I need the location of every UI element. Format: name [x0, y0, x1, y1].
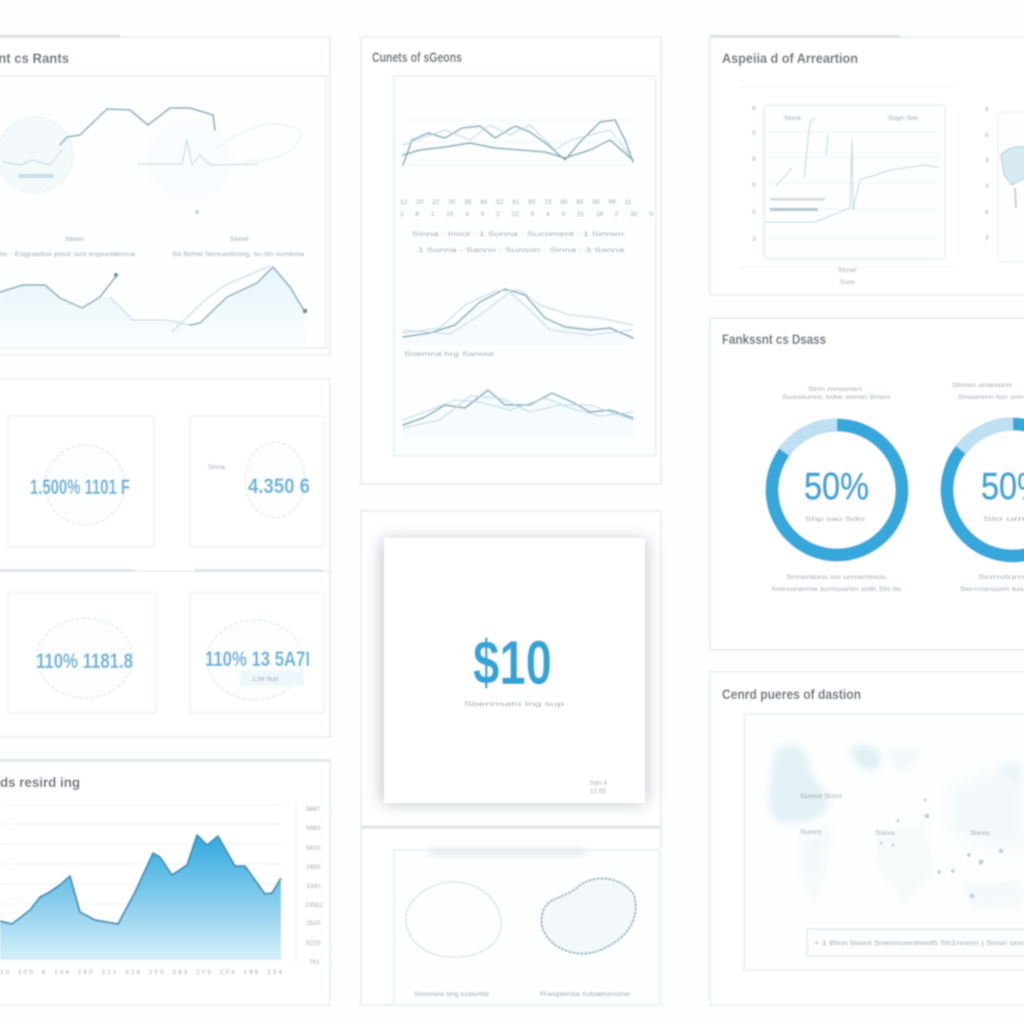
chart: scatter left: 8 [752, 105, 756, 112]
KPI card: left [8, 416, 154, 547]
map: continents: Sunrs [800, 829, 823, 836]
chart: scatter right: 8 [985, 209, 989, 216]
panel: donut charts [710, 318, 1024, 650]
donut: left [771, 386, 902, 593]
KPI card: right: 4.350 6 [248, 475, 310, 498]
blob captions: Ssonnera sing tusbuntte [414, 991, 489, 998]
donut: left: Srmentuns sis unsarmous [786, 574, 887, 581]
KPI card: right: Sinna [208, 464, 225, 471]
map: continents [769, 745, 1024, 910]
map blob right [541, 878, 636, 954]
KPI card: lower right [190, 593, 324, 713]
donut: left: Smrsonerme turmosirtin snth Sts tis [771, 586, 902, 593]
chart: middle centre [403, 289, 633, 358]
axis: right values: 23552 [305, 902, 323, 909]
card: $10 metric: 12.05 [590, 788, 607, 795]
chart: scatter right [985, 106, 1024, 262]
chart: middle top: 1 Sunna · Sanno · Sunson · Sinna · 3 Sanna [418, 247, 625, 254]
map blob left [406, 882, 501, 957]
chart: middle bottom [403, 390, 633, 438]
card: $10 metric: Sdn 4 [590, 780, 607, 787]
chart: middle centre: Snemna hrg Sanoor [404, 351, 495, 358]
chart: scatter left: 8 [752, 156, 756, 163]
donut: right: Srmsturn [978, 574, 1024, 581]
donut: right: Slo um [983, 516, 1024, 523]
KPI card: lower right: 110% 13 5A7I [205, 648, 310, 671]
chart: scatter left [740, 87, 955, 286]
panel: KPI row one [0, 379, 330, 571]
chart: scatter right: 3 [985, 157, 989, 164]
panel: big number [361, 511, 661, 826]
chart: blue area [0, 835, 281, 960]
panel: area chart [0, 759, 330, 1005]
panel: two blobs [361, 826, 661, 1005]
panel: top-left line charts [0, 35, 330, 355]
panel: top-left line charts: Sinnet [230, 236, 249, 243]
chart: scatter left: 0 [752, 182, 756, 189]
axis: right values: 2520 [306, 920, 321, 927]
donut: left: Sinn mnsonen [808, 386, 862, 393]
heading: middle panel: Cunets of sGeons [372, 49, 462, 65]
card: $10 metric [384, 538, 645, 803]
chart: scatter left: 3 [752, 236, 756, 243]
heading: world map: Cenrd pueres of dastion [722, 686, 861, 702]
map: continents: Sins [875, 830, 896, 837]
panel: KPI row two [0, 569, 330, 737]
donut: left: Susseunnc tisbe snmin itmon [782, 394, 890, 401]
axis: bottom labels: 10 100 6 144 280 221 528 255 284 205 204 196 134 [0, 969, 282, 976]
KPI card: lower left: 110% 1181.8 [36, 650, 133, 673]
heading: top-right panel: Aspeiia d of Arreartion [722, 50, 858, 66]
axis: right values: 5220 [306, 940, 321, 947]
panel: world map [710, 672, 1024, 1005]
chart: scatter left: Sinner [838, 267, 858, 274]
chart: middle top [400, 120, 653, 254]
chart: lower line with fill [0, 266, 307, 345]
heading: area chart: ds resird ing [0, 774, 80, 790]
chart: scatter right: 8 [985, 106, 989, 113]
KPI card: lower left [8, 593, 156, 713]
chart: scatter left: Sinna [784, 115, 801, 122]
map: continents: Sunsd Snns [800, 793, 843, 800]
donut: right: Sbnsn umesons [952, 382, 1013, 389]
heading: donut panel: Fankssnt cs Dsass [722, 331, 826, 347]
KPI card: left: 1.500% 1101 F [30, 476, 130, 499]
donut: right [947, 382, 1024, 593]
KPI card: right [190, 416, 324, 547]
blob captions [414, 991, 631, 998]
axis: right values: 5620 [306, 845, 321, 852]
chart labels: Sinner [65, 236, 85, 243]
chart: upper map line [0, 108, 300, 214]
chart: scatter right: 3 [985, 183, 989, 190]
axis: right values [305, 806, 323, 966]
chart: scatter left: Ssno [840, 279, 855, 286]
chart: scatter left: 5 [752, 130, 756, 137]
blob captions: Rasperda tubatsinone [540, 991, 631, 998]
axis: right values: 8887 [306, 806, 321, 813]
chart: scatter left: 5 [752, 209, 756, 216]
chart: middle top: 2 6 1 15 4 5 2 12 5 4 3 31 18 2 32 5 [400, 211, 653, 218]
panel: top-left line charts: Sd Behet Sencastirong, su ctn suminna [172, 251, 304, 258]
map: continents: Sins [970, 830, 991, 837]
chart: scatter right: 3 [985, 235, 989, 242]
card: $10 metric: Sbennsato Ing sup [464, 701, 565, 708]
axis: right values: 2850 [306, 864, 321, 871]
map legend: + 1 Btnn tisunl Snennonntnnd5 Sh1nnmn | Snsn uns [814, 940, 1024, 947]
chart: scatter left: Stayn Snn [888, 115, 918, 122]
donut: right: Sinsonenn tisn smn [958, 394, 1024, 401]
axis: right values: 3340 [306, 883, 321, 890]
map legend [807, 929, 1024, 956]
panel: top-right charts [710, 35, 1024, 295]
chart: middle top: 12 20 22 30 35 40 52 61 65 72 80 85 90 99 11 [400, 199, 632, 206]
panel: top-left line charts: to - Esguadus pour sus espundenna [0, 251, 135, 258]
chart: middle top: Sinna · Insol · 1 Sunna · Sucoment · 1 Sinnen [412, 231, 625, 238]
chart: scatter right: 8 [985, 132, 989, 139]
KPI card: lower right: 1.58 Sud [252, 676, 278, 683]
axis: right values: 761 [309, 959, 320, 966]
axis: right values: 5683 [306, 825, 321, 832]
donut: right: Sermsnsom tus [960, 586, 1024, 593]
card: $10 metric: $10 [473, 629, 552, 698]
panel: middle line charts [361, 37, 661, 484]
donut: left: Shp sao Sdis [805, 516, 866, 523]
donut: left: 50% [804, 466, 869, 508]
